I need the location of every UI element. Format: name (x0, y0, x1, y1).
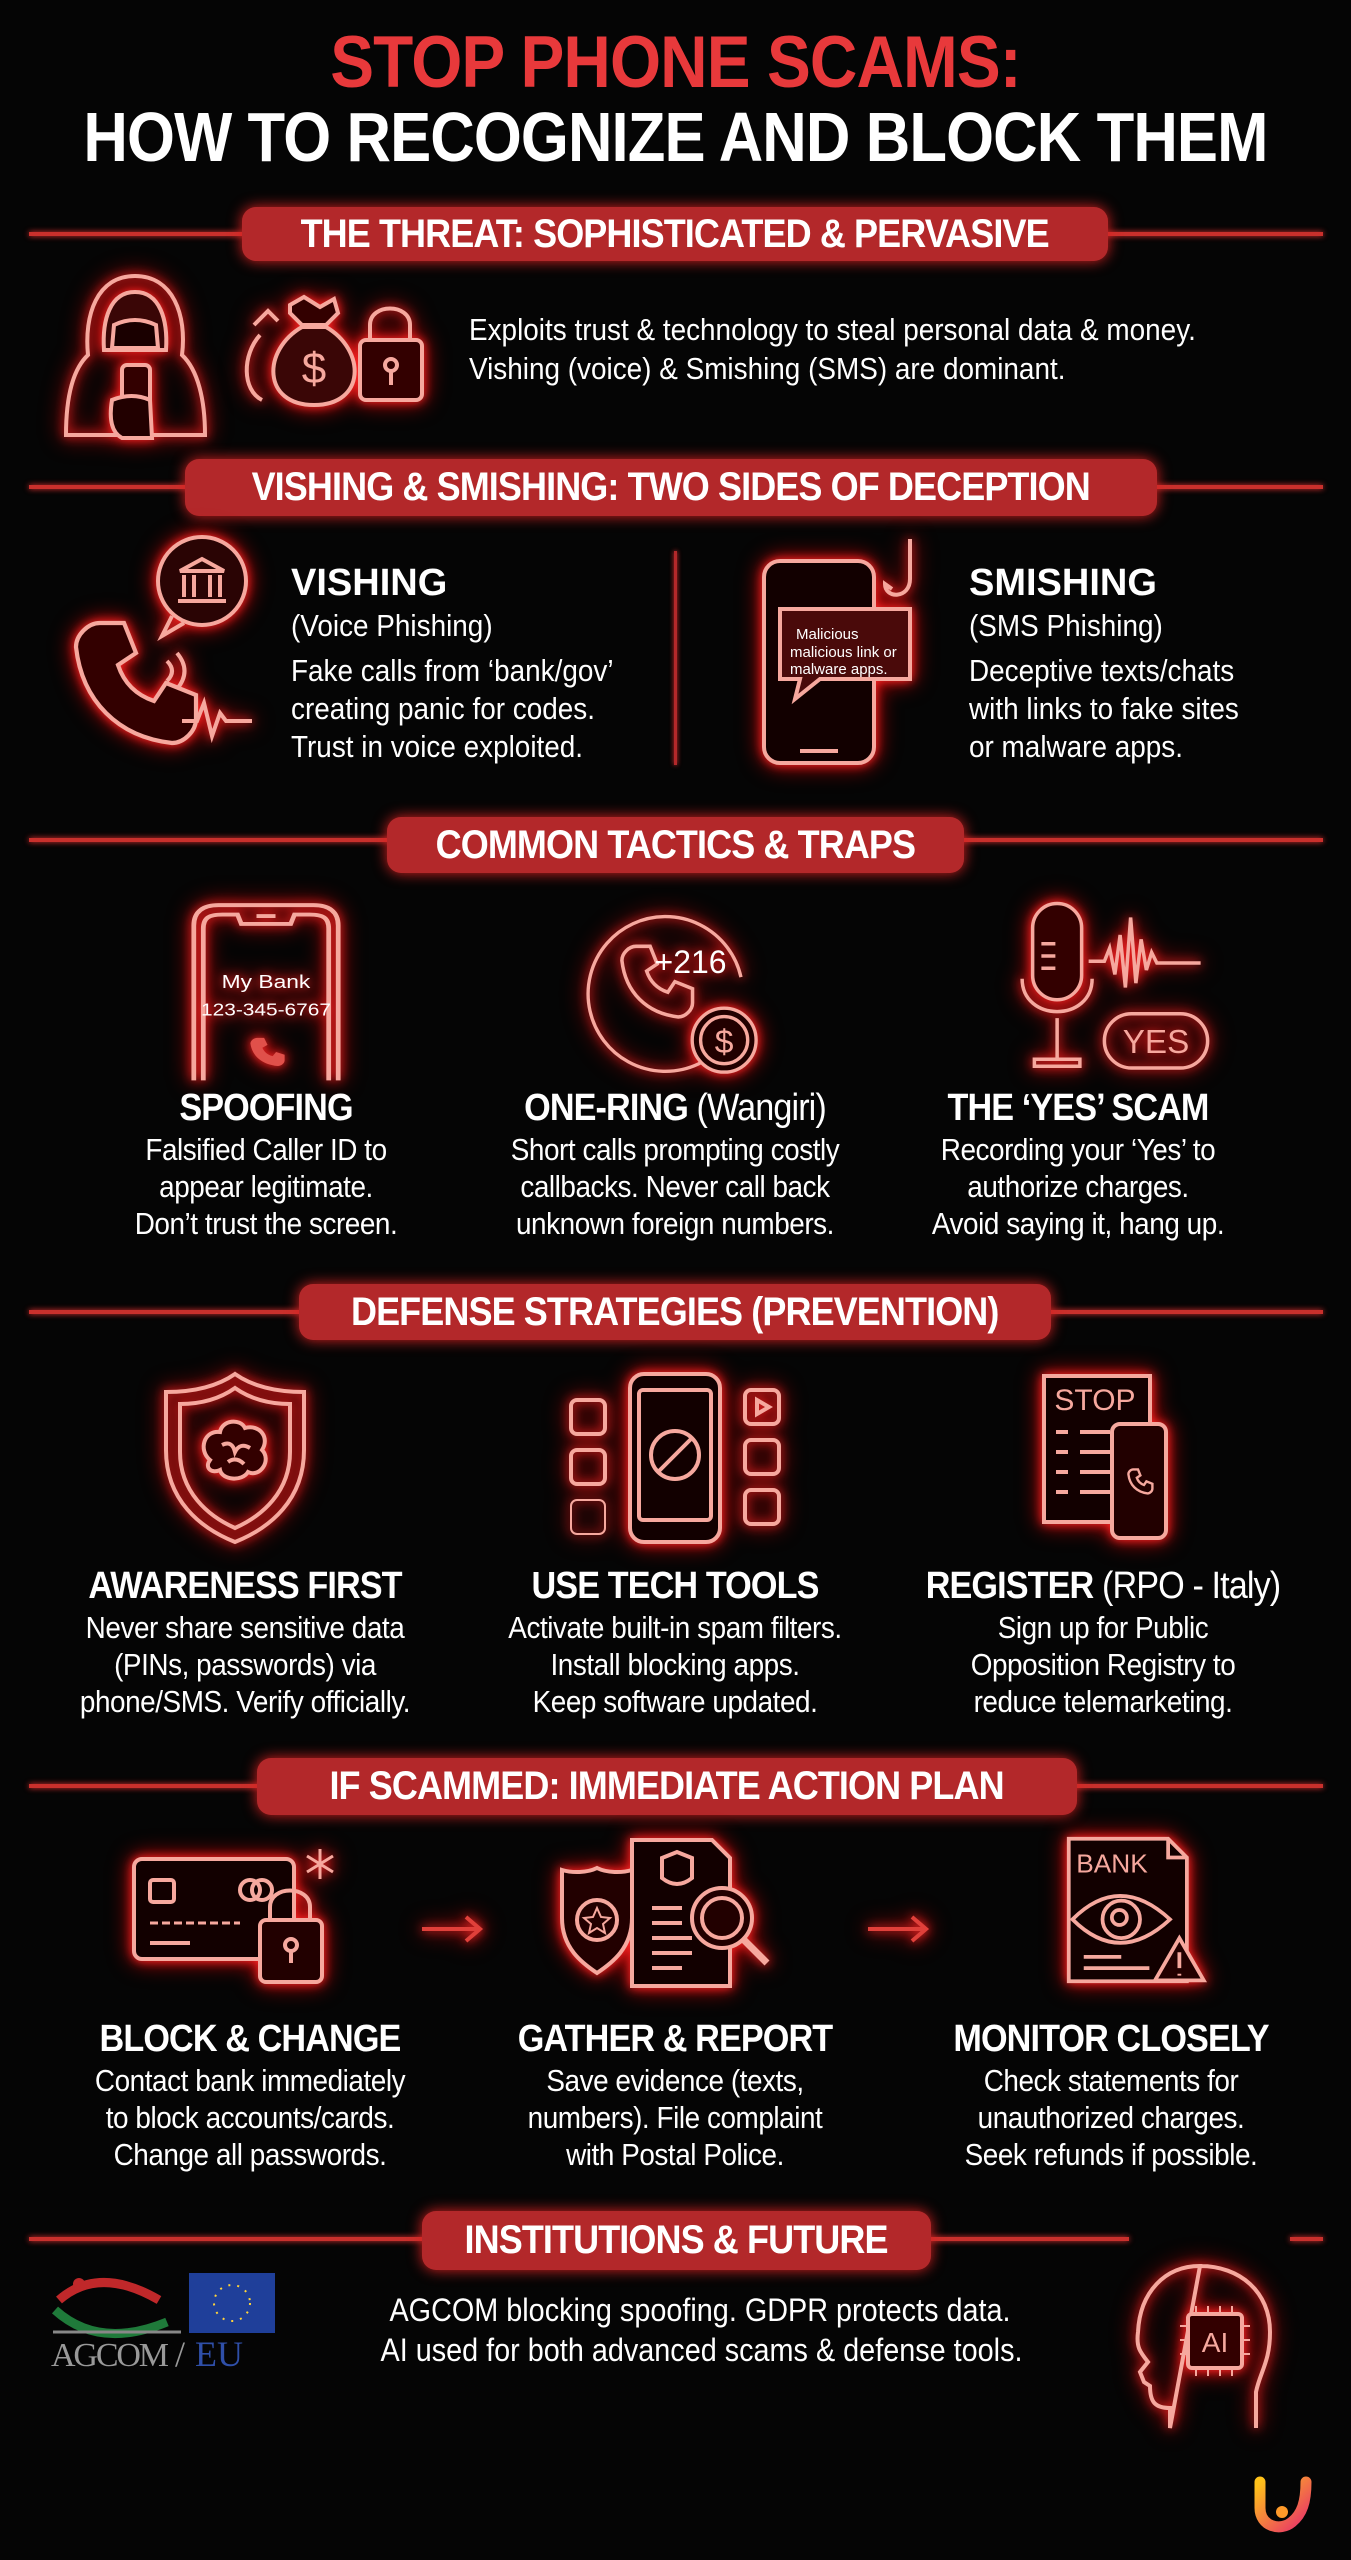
logo: bottom right (1254, 2476, 1312, 2532)
icon: tech tools phone (552, 1354, 798, 1562)
column: tech tools: Activate built-in spam filters. (508, 1610, 842, 1645)
column: awareness: (PINs, passwords) via (114, 1647, 376, 1682)
icon: vishing phone with bank bubble (57, 519, 266, 762)
column: tech tools (508, 1565, 842, 1719)
text: institutions: AI used for both advanced scams & defense tools. (380, 2332, 1022, 2368)
arrow 2 (858, 1904, 941, 1954)
title (83, 22, 1268, 176)
icon: badge and report (542, 1820, 782, 2006)
icon: spoofing phone: 123-345-6767 (201, 1001, 331, 1020)
icon: money bag and lock (228, 280, 442, 425)
column: register: Opposition Registry to (971, 1647, 1235, 1682)
column: register: REGISTER (RPO - Italy) (926, 1565, 1280, 1607)
column: spoofing (135, 1087, 397, 1241)
icon: AI head (1119, 2247, 1289, 2438)
icon: AI head: AI (1202, 2327, 1228, 2358)
column: block & change: Contact bank immediately (95, 2063, 405, 2098)
column: monitor: unauthorized charges. (978, 2100, 1244, 2135)
text: vishing: (Voice Phishing) (291, 608, 493, 643)
column: gather & report (518, 2018, 833, 2172)
column: awareness: AWARENESS FIRST (88, 1565, 402, 1607)
column: gather & report: with Postal Police. (566, 2137, 784, 2172)
heading: defense strategies: DEFENSE STRATEGIES (PREVENTION) (351, 1290, 999, 1334)
heading: if scammed (257, 1758, 1077, 1815)
text: vishing: creating panic for codes. (291, 691, 595, 726)
text: vishing: VISHING (291, 562, 447, 604)
heading: vishing & smishing (185, 459, 1157, 516)
column: one-ring: ONE-RING (Wangiri) (524, 1087, 826, 1129)
icon: smishing phone with hook (744, 530, 930, 784)
column: gather & report: Save evidence (texts, (546, 2063, 804, 2098)
heading: institutions (422, 2211, 931, 2270)
column: awareness (80, 1565, 410, 1719)
icon: yes scam mic (1006, 885, 1225, 1087)
column: one-ring: callbacks. Never call back (520, 1169, 830, 1204)
text: threat description: Exploits trust & technology to steal personal data & money. (469, 312, 1196, 347)
icon: yes scam mic: YES (1123, 1024, 1189, 1061)
column: yes scam: Avoid saying it, hang up. (932, 1206, 1224, 1241)
icon: spoofing phone (174, 886, 358, 1094)
arrow 1 (412, 1904, 495, 1954)
column: one-ring: unknown foreign numbers. (516, 1206, 834, 1241)
column: block & change (95, 2018, 406, 2172)
column: tech tools: Keep software updated. (533, 1684, 817, 1719)
icon: smishing phone with hook: malware apps. (790, 661, 888, 678)
column: gather & report: GATHER & REPORT (518, 2018, 832, 2060)
text: smishing: (SMS Phishing) (969, 608, 1163, 643)
heading: if scammed: IF SCAMMED: IMMEDIATE ACTION PLAN (330, 1764, 1004, 1808)
text: vishing: Trust in voice exploited. (291, 729, 583, 764)
icon: smishing phone with hook: malicious link or (790, 644, 897, 661)
column: spoofing: SPOOFING (179, 1087, 353, 1129)
column: monitor: MONITOR CLOSELY (953, 2018, 1269, 2060)
icon: bank monitor: BANK (1076, 1849, 1148, 1879)
text: smishing: or malware apps. (969, 729, 1183, 764)
column: one-ring (511, 1087, 840, 1241)
heading: the threat: THE THREAT: SOPHISTICATED & PERVASIVE (301, 212, 1049, 256)
icon: shield brain (146, 1358, 324, 1558)
icon: bank monitor (1048, 1818, 1220, 2002)
text: institutions: AGCOM blocking spoofing. GDPR protects data. (389, 2292, 1011, 2328)
text: institutions (380, 2292, 1022, 2368)
text: smishing: SMISHING (969, 562, 1157, 604)
column: awareness: phone/SMS. Verify officially. (80, 1684, 410, 1719)
icon: stop registry (1024, 1356, 1186, 1558)
text: vishing: Fake calls from ‘bank/gov’ (291, 653, 614, 688)
text: smishing: with links to fake sites (969, 691, 1239, 726)
text: smishing (969, 562, 1239, 764)
heading: common tactics: COMMON TACTICS & TRAPS (436, 823, 915, 867)
text: vishing (291, 562, 614, 764)
column: spoofing: Don’t trust the screen. (135, 1206, 397, 1241)
column: block & change: to block accounts/cards. (106, 2100, 394, 2135)
icon: money bag and lock: $ (302, 344, 326, 393)
column: yes scam (932, 1087, 1224, 1241)
text: smishing: Deceptive texts/chats (969, 653, 1234, 688)
icon: spoofing phone: My Bank (222, 972, 311, 993)
text: threat description: Vishing (voice) & Smishing (SMS) are dominant. (469, 351, 1065, 386)
icon: one-ring (570, 898, 775, 1091)
column: spoofing: Falsified Caller ID to (145, 1132, 387, 1167)
heading: vishing & smishing: VISHING & SMISHING: TWO SIDES OF DECEPTION (252, 465, 1090, 509)
icon: stop registry: STOP (1054, 1384, 1136, 1417)
column: gather & report: numbers). File complaint (528, 2100, 822, 2135)
column: awareness: Never share sensitive data (86, 1610, 404, 1645)
column: monitor: Check statements for (984, 2063, 1238, 2098)
column: monitor (953, 2018, 1269, 2172)
title: STOP PHONE SCAMS: (330, 22, 1021, 103)
title: HOW TO RECOGNIZE AND BLOCK THEM (83, 98, 1268, 176)
heading: common tactics (387, 817, 964, 873)
icon: one-ring: +216 (655, 944, 726, 980)
heading: institutions: INSTITUTIONS & FUTURE (465, 2218, 888, 2262)
heading: defense strategies (299, 1284, 1051, 1340)
icon: card lock (114, 1838, 346, 2002)
column: spoofing: appear legitimate. (159, 1169, 373, 1204)
column: block & change: BLOCK & CHANGE (100, 2018, 400, 2060)
column: block & change: Change all passwords. (114, 2137, 386, 2172)
divider (674, 551, 677, 765)
column: yes scam: THE ‘YES’ SCAM (947, 1087, 1209, 1129)
column: register: reduce telemarketing. (974, 1684, 1232, 1719)
icon: hooded hacker (48, 258, 224, 458)
column: yes scam: authorize charges. (967, 1169, 1189, 1204)
icon: one-ring: $ (715, 1024, 734, 1061)
logo: AGCOM / EU (51, 2273, 275, 2370)
column: register: Sign up for Public (998, 1610, 1208, 1645)
icon: smishing phone with hook: Malicious (796, 626, 859, 643)
column: register (926, 1565, 1280, 1719)
column: tech tools: Install blocking apps. (550, 1647, 800, 1682)
column: monitor: Seek refunds if possible. (965, 2137, 1257, 2172)
text: threat description (469, 312, 1196, 386)
column: yes scam: Recording your ‘Yes’ to (941, 1132, 1215, 1167)
column: tech tools: USE TECH TOOLS (531, 1565, 818, 1607)
column: one-ring: Short calls prompting costly (511, 1132, 839, 1167)
